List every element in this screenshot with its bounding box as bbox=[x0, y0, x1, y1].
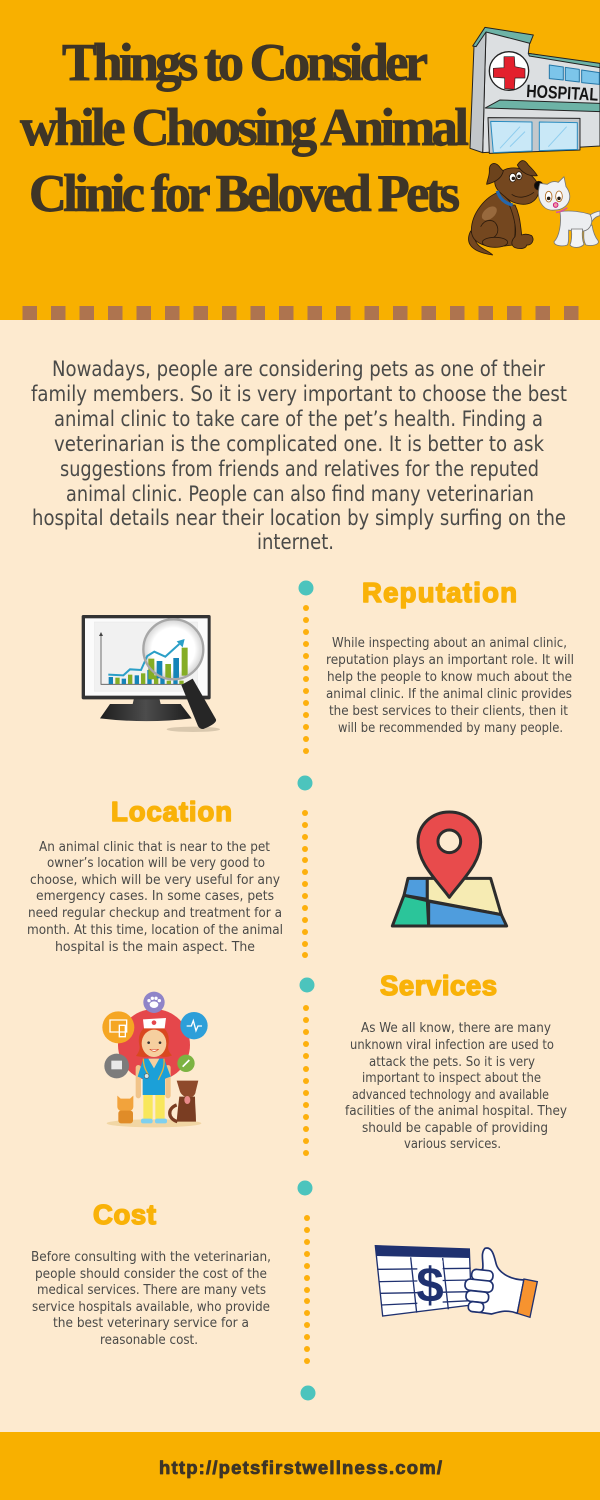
text: Services: various services. bbox=[404, 1137, 501, 1152]
timeline node 4 bbox=[298, 1180, 312, 1196]
timeline dots 1 bbox=[303, 605, 309, 754]
text: Services: unknown viral infection are used to bbox=[350, 1038, 554, 1053]
text: Location: need regular checkup and treatment for a bbox=[28, 906, 282, 921]
text: Services: As We all know, there are many bbox=[361, 1021, 551, 1036]
footer url: http://petsfirstwellness.com/ bbox=[159, 1457, 442, 1478]
timeline node 3 bbox=[300, 978, 314, 992]
timeline dots 4 bbox=[304, 1215, 310, 1364]
text: Cost: medical services. There are many vets bbox=[37, 1283, 266, 1298]
text: Cost: reasonable cost. bbox=[100, 1333, 198, 1348]
text: Location: month. At this time, location of the animal bbox=[27, 923, 283, 938]
text: Services: advanced technology and available bbox=[352, 1088, 549, 1103]
heading: Location: Location bbox=[111, 796, 232, 827]
icon: map pin bbox=[392, 812, 507, 926]
timeline node 5 bbox=[300, 1386, 316, 1400]
text: Cost: people should consider the cost of the bbox=[35, 1267, 267, 1282]
text: Cost: Before consulting with the veterinarian, bbox=[31, 1250, 271, 1265]
icon: vet nurse with pets bbox=[102, 992, 208, 1127]
icon: price sheet and thumbs up: $ bbox=[416, 1258, 444, 1313]
text: Services: should be capable of providing bbox=[362, 1121, 548, 1136]
text: Reputation: will be recommended by many people. bbox=[338, 721, 563, 736]
timeline bbox=[298, 580, 316, 1400]
title: Things to Consider bbox=[62, 34, 428, 92]
text: Location: hospital is the main aspect. The bbox=[55, 940, 255, 955]
text: Location: owner’s location will be very good to bbox=[47, 856, 265, 871]
heading: Services: Services bbox=[380, 970, 497, 1001]
text: Reputation: the best services to their clients, then it bbox=[329, 704, 568, 719]
title bbox=[20, 34, 469, 223]
text: Services bbox=[345, 1021, 567, 1152]
intro paragraph: internet. bbox=[257, 530, 334, 554]
timeline dots 3 bbox=[303, 1005, 309, 1156]
timeline dots 2 bbox=[302, 810, 308, 958]
intro paragraph bbox=[31, 357, 567, 554]
text: Services: attack the pets. So it is very bbox=[369, 1055, 535, 1070]
text: Reputation: animal clinic. If the animal clinic provides bbox=[326, 687, 572, 702]
icon: price sheet and thumbs up bbox=[375, 1246, 537, 1317]
title: Clinic for Beloved Pets bbox=[29, 165, 460, 223]
icon: dog and cat bbox=[469, 161, 600, 255]
text: Cost: service hospitals available, who provide bbox=[32, 1300, 270, 1315]
text: Location: emergency cases. In some cases, pets bbox=[36, 889, 274, 904]
timeline node 1 bbox=[298, 580, 314, 596]
text: Services: important to inspect about the bbox=[362, 1071, 541, 1086]
timeline node 2 bbox=[298, 776, 312, 790]
decorative squares row bbox=[22, 306, 578, 320]
text: Reputation: help the people to know much about the bbox=[327, 670, 572, 685]
text: Location: An animal clinic that is near to the pet bbox=[39, 840, 270, 855]
text: Location bbox=[27, 840, 283, 955]
text: Reputation: reputation plays an important role. It will bbox=[326, 653, 574, 668]
cat bbox=[584, 211, 600, 227]
panel: header band bbox=[0, 0, 600, 320]
text: Reputation bbox=[326, 636, 574, 736]
icon: monitor with magnifier bbox=[82, 615, 220, 732]
heading: Cost: Cost bbox=[93, 1199, 156, 1230]
panel: footer band bbox=[0, 1432, 600, 1500]
icon: hospital building bbox=[470, 27, 600, 153]
text: Cost bbox=[31, 1250, 271, 1348]
text: Services: facilities of the animal hospital. They bbox=[345, 1104, 567, 1119]
text: Location: choose, which will be very useful for any bbox=[30, 873, 280, 888]
text: Reputation: While inspecting about an animal clinic, bbox=[332, 636, 567, 651]
title: while Choosing Animal bbox=[20, 99, 469, 157]
text: Cost: the best veterinary service for a bbox=[53, 1316, 249, 1331]
heading: Reputation: Reputation bbox=[362, 577, 517, 608]
